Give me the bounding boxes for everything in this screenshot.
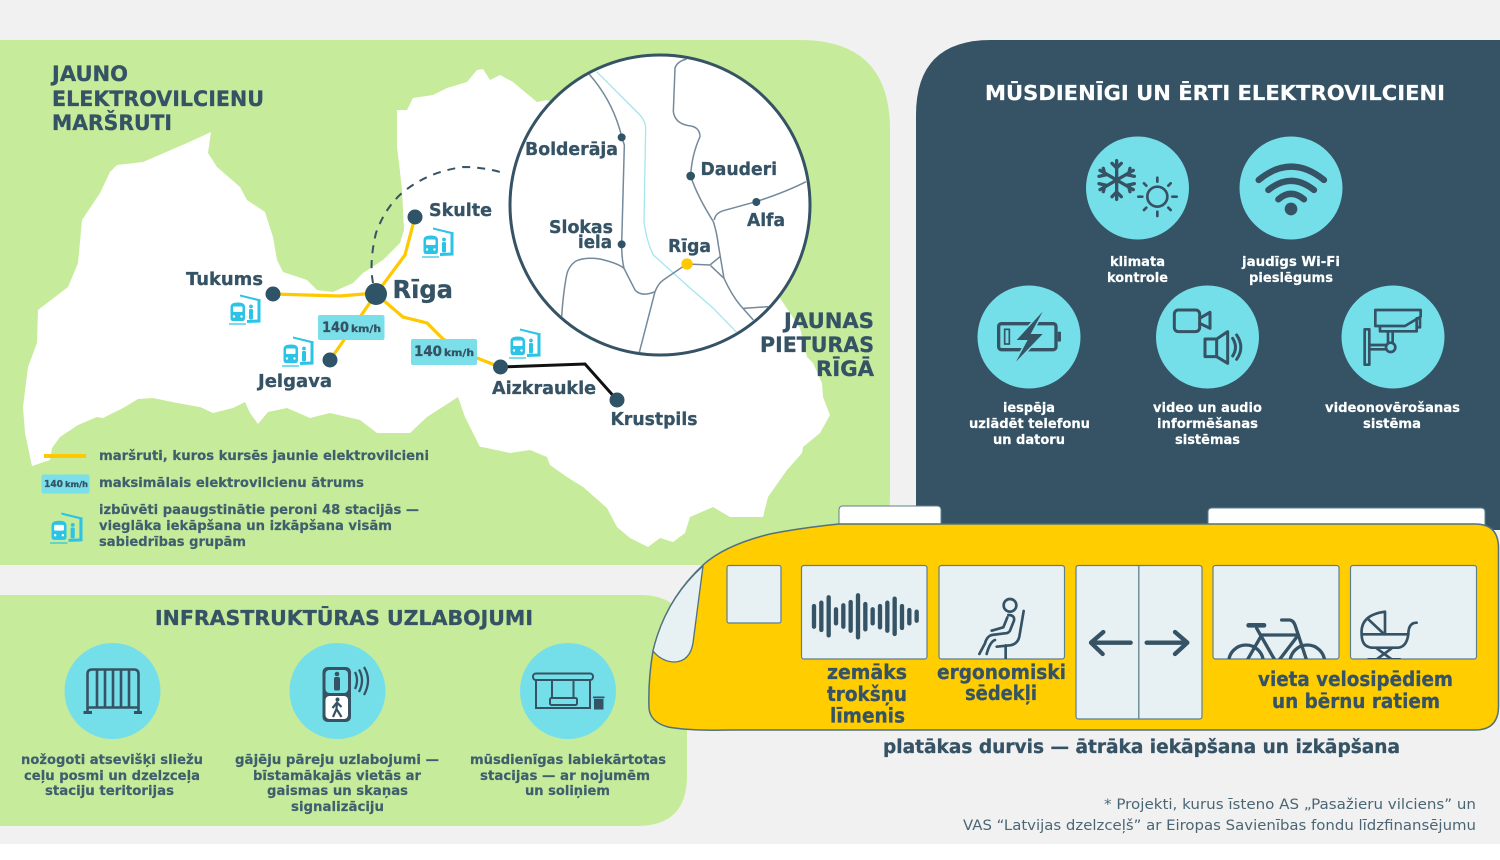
windshield <box>653 566 703 662</box>
panel: new train routes map <box>0 40 890 565</box>
label: video and audio: sistēmas <box>1175 432 1240 448</box>
label: fenced sections: ceļu posmi un dzelzceļa <box>24 768 200 784</box>
label: wifi: jaudīgs Wi-Fi <box>1241 254 1340 270</box>
caption: wider doors: platākas durvis — ātrāka iekāpšana un izkāpšana <box>883 737 1400 758</box>
icon: sound wave <box>814 595 917 637</box>
label: surveillance: sistēma <box>1363 416 1421 432</box>
label: bikes and prams: vieta velosipēdiem <box>1258 667 1453 691</box>
icon: pedestrian crossing signal <box>290 643 386 739</box>
label: video and audio: informēšanas <box>1157 416 1258 432</box>
icon: bicycle <box>1227 618 1326 659</box>
city labels: Krustpils <box>610 409 698 430</box>
label: modern stations <box>470 752 666 799</box>
label: wifi <box>1241 254 1340 286</box>
icon: pram <box>1362 612 1417 659</box>
label: pedestrian crossings <box>235 752 439 815</box>
heading: modern trains: MŪSDIENĪGI UN ĒRTI ELEKTROVILCIENI <box>985 81 1445 105</box>
dashed route to Riga detail <box>372 167 500 283</box>
icon: video surveillance <box>1342 286 1444 388</box>
label: climate: klimata <box>1110 254 1165 270</box>
door <box>1076 566 1202 719</box>
label: noise <box>827 660 907 728</box>
panel: infrastructure improvements <box>0 595 687 826</box>
icon: seat <box>979 599 1024 660</box>
legend: 140 <box>44 479 63 490</box>
heading: infrastructure: INFRASTRUKTŪRAS UZLABOJUMI <box>155 606 533 630</box>
station icons <box>229 228 541 366</box>
city labels: Aizkraukle <box>492 378 596 399</box>
windows <box>727 566 1476 659</box>
Riga detail circle map <box>510 55 810 355</box>
icon: station shelter <box>520 643 616 739</box>
train illustration <box>649 506 1498 730</box>
label: climate <box>1107 254 1168 286</box>
heading: routes: ELEKTROVILCIENU <box>52 87 264 111</box>
train body <box>649 524 1498 730</box>
yellow route lines <box>273 217 500 367</box>
speed badge <box>318 315 384 340</box>
heading: new stops in Riga: RĪGĀ <box>816 356 875 381</box>
label: video and audio: video un audio <box>1153 400 1262 416</box>
Riga detail circle map: Dauderi <box>700 159 777 180</box>
label: noise: zemāks <box>827 660 907 684</box>
icon: charging <box>978 286 1080 388</box>
station dots <box>266 210 624 408</box>
icon: wifi <box>1240 136 1342 240</box>
label: pedestrian crossings: gaismas un skaņas <box>267 783 408 799</box>
legend: km/h <box>65 480 88 489</box>
label: seats <box>937 660 1066 705</box>
label: pedestrian crossings: bīstamākajās vietās ar <box>253 768 421 784</box>
legend: izbūvēti paaugstinātie peroni 48 stacijās — <box>99 502 419 518</box>
Riga detail circle map: Bolderāja <box>525 139 618 160</box>
map of Latvia <box>23 69 830 547</box>
label: video and audio <box>1153 400 1262 448</box>
label: bikes and prams <box>1258 667 1453 713</box>
city labels: Skulte <box>429 200 492 221</box>
city labels <box>186 200 698 430</box>
label: fenced sections <box>21 752 203 799</box>
heading: new stops in Riga <box>760 309 875 381</box>
label: modern stations: stacijas — ar nojumēm <box>480 768 650 784</box>
label: noise: līmenis <box>830 704 905 728</box>
city labels: Rīga <box>392 275 453 304</box>
label: bikes and prams: un bērnu ratiem <box>1272 689 1440 713</box>
heading: routes: JAUNO <box>50 62 128 86</box>
heading: routes <box>50 62 264 135</box>
Riga detail circle map: iela <box>578 232 612 253</box>
label: fenced sections: nožogoti atsevišķi sliežu <box>21 752 203 768</box>
label: pedestrian crossings: gājēju pāreju uzlabojumi — <box>235 752 439 768</box>
label: climate: kontrole <box>1107 270 1168 286</box>
speed badge: 140 <box>414 344 442 360</box>
legend: maršruti, kuros kursēs jaunie elektrovilcieni <box>99 448 429 464</box>
speed badge: km/h <box>351 324 381 335</box>
label: seats: sēdekļi <box>965 681 1037 705</box>
footnote: VAS “Latvijas dzelzceļš” ar Eiropas Savienības fondu līdzfinansējumu <box>963 818 1476 834</box>
label: fenced sections: staciju teritorijas <box>45 783 174 799</box>
legend: vieglāka iekāpšana un izkāpšana visām <box>99 518 392 534</box>
footnote: * Projekti, kurus īsteno AS „Pasažieru vilciens” un <box>1104 797 1476 813</box>
icon: video and audio <box>1156 286 1259 388</box>
label: modern stations: mūsdienīgas labiekārtotas <box>470 752 666 768</box>
heading: new stops in Riga: JAUNAS <box>782 309 874 333</box>
speed badge: 140 <box>322 320 349 336</box>
city labels: Tukums <box>186 269 263 290</box>
label: wifi: pieslēgums <box>1249 270 1333 286</box>
label: charging <box>969 400 1090 448</box>
legend: sabiedrības grupām <box>99 534 246 550</box>
Riga detail circle map: Rīga <box>668 236 711 257</box>
icon: fence <box>64 643 160 739</box>
black route line <box>500 364 617 400</box>
label: seats: ergonomiski <box>937 660 1066 684</box>
legend <box>42 448 429 550</box>
label: modern stations: un soliņiem <box>525 783 610 799</box>
panel: modern trains <box>916 40 1500 530</box>
label: charging: uzlādēt telefonu <box>969 416 1090 432</box>
label: pedestrian crossings: signalizāciju <box>291 799 384 815</box>
speed badge <box>411 339 477 365</box>
legend: maksimālais elektrovilcienu ātrums <box>99 475 364 491</box>
label: surveillance <box>1325 400 1460 432</box>
label: charging: iespēja <box>1003 400 1055 416</box>
Riga detail circle map: Alfa <box>747 210 785 231</box>
city labels: Jelgava <box>256 371 332 392</box>
heading: new stops in Riga: PIETURAS <box>760 333 874 357</box>
speed badge: km/h <box>444 348 474 359</box>
Riga detail circle map: Slokas <box>549 217 613 238</box>
roof units <box>839 506 1485 525</box>
footnote <box>963 797 1476 834</box>
label: surveillance: videonovērošanas <box>1325 400 1460 416</box>
label: noise: trokšņu <box>827 682 907 706</box>
label: charging: un datoru <box>993 432 1065 448</box>
heading: routes: MARŠRUTI <box>52 110 172 135</box>
icon: climate control <box>1086 136 1189 240</box>
